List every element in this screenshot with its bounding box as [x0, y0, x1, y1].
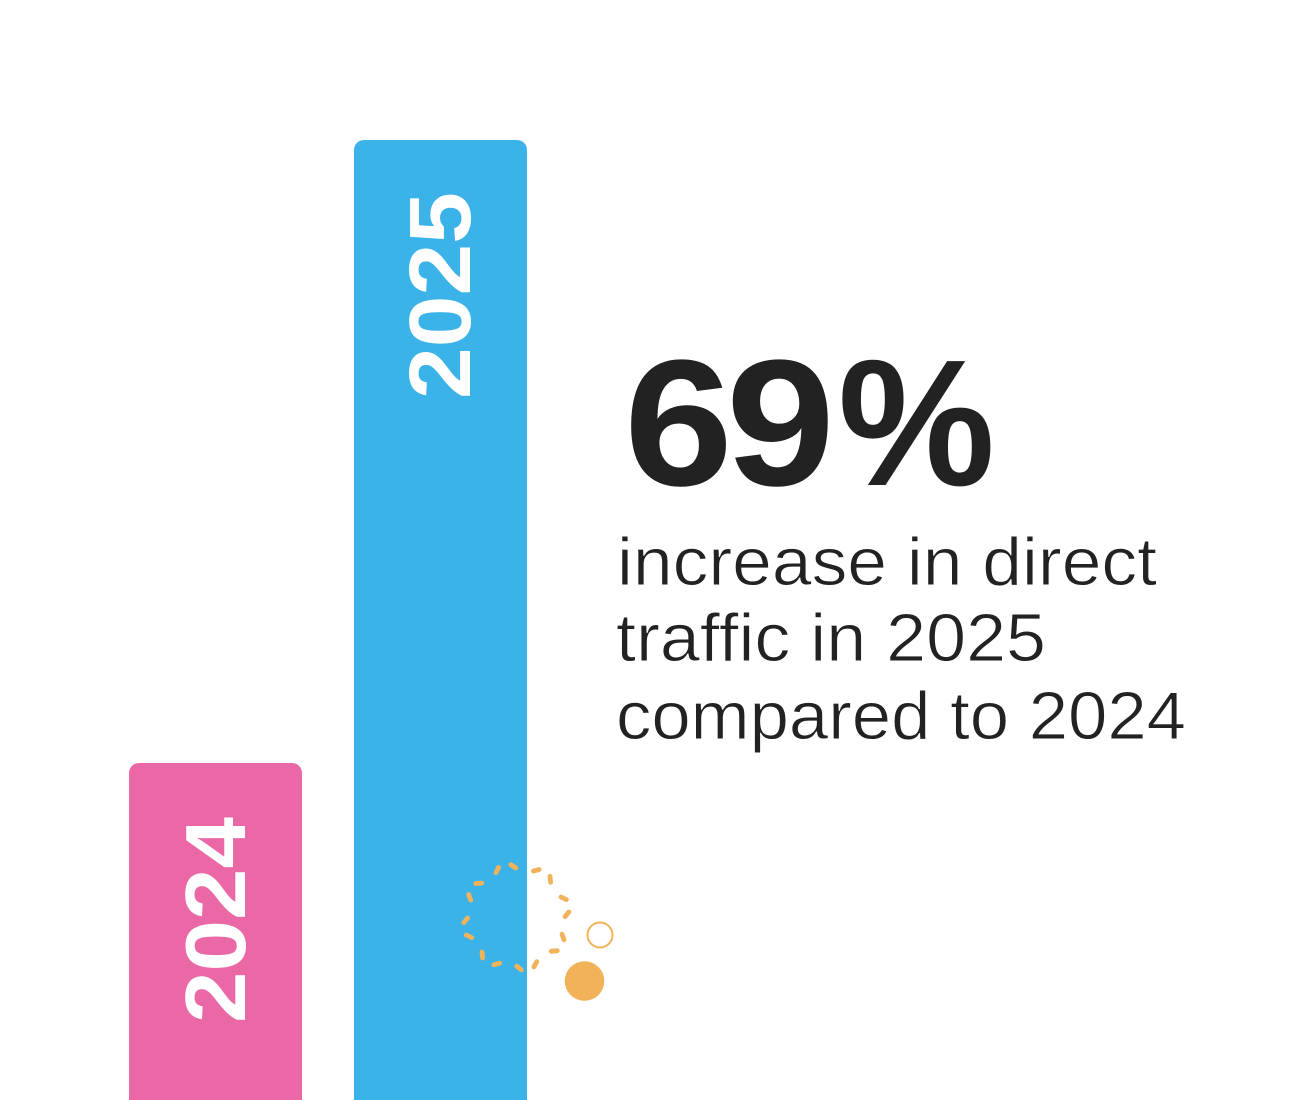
statistic: 69% [624, 323, 995, 524]
statistic: 69%: 6 [624, 323, 733, 524]
bar label: 2025: 2025 [392, 192, 489, 399]
description text [616, 524, 1186, 754]
description text: compared to 2024 [616, 678, 1186, 754]
icon: dashed decorative circle [464, 865, 569, 970]
bar: 2024 [129, 763, 302, 1100]
statistic: 69%: 9 [726, 323, 835, 524]
description text: traffic in 2025 [616, 600, 1046, 676]
icon: filled circle [565, 961, 604, 1001]
icon: small ring [588, 922, 612, 948]
bar label: 2024: 2024 [169, 817, 264, 1023]
bar: 2025 [354, 140, 527, 1100]
statistic: 69%: % [838, 323, 995, 524]
description text: increase in direct [617, 524, 1157, 600]
